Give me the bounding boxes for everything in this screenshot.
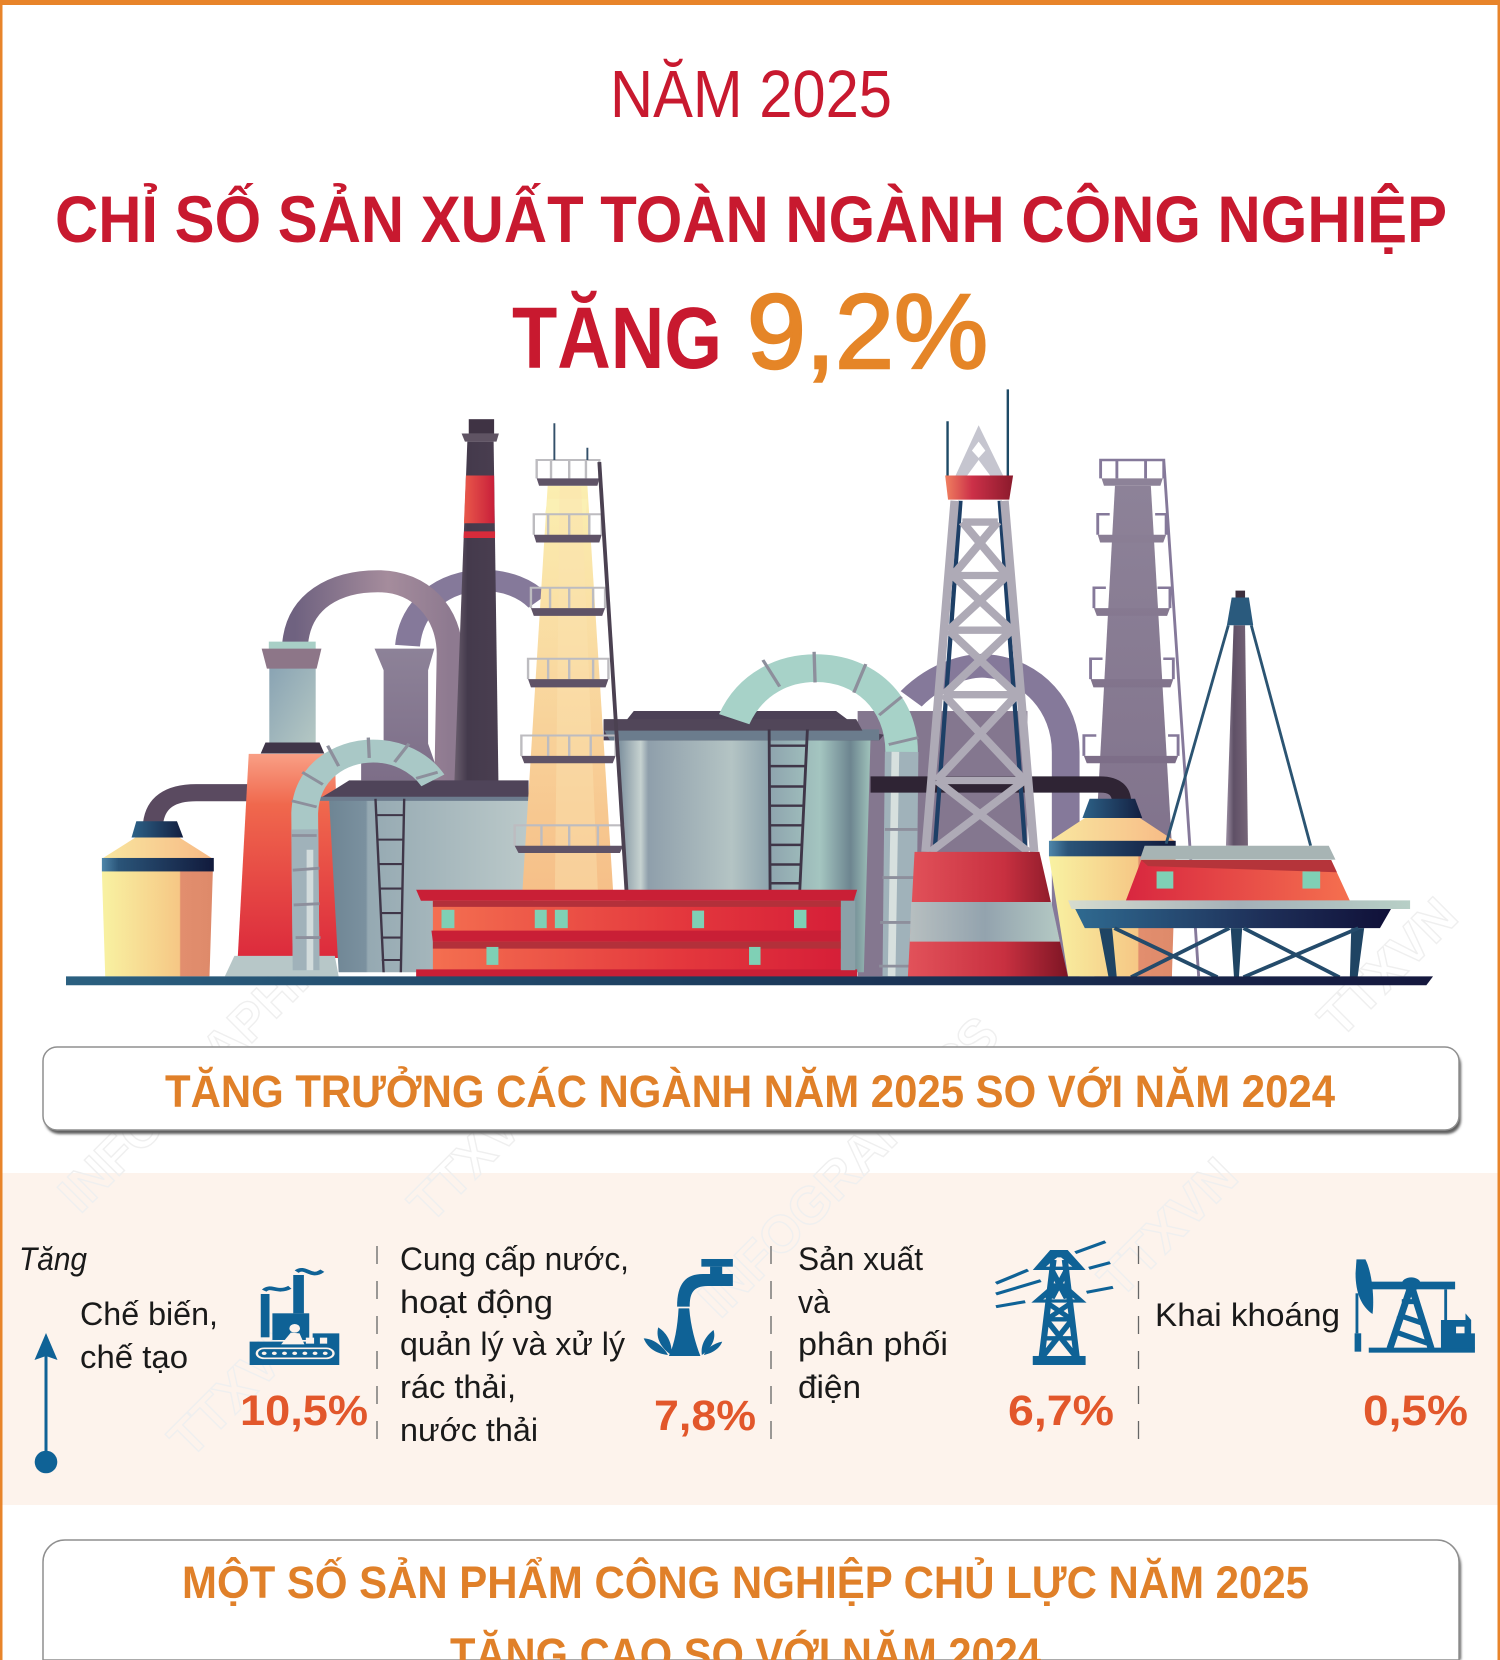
tower platforms <box>515 460 623 846</box>
ground line <box>66 976 1433 985</box>
title block <box>55 57 1447 391</box>
icon: water tap <box>644 1259 733 1356</box>
foreground purple arch pipe <box>295 581 450 784</box>
back silhouette: right tower <box>1084 460 1199 976</box>
tall dark chimney <box>454 419 499 781</box>
tower antennas <box>554 423 587 460</box>
axis label: increase: Tăng <box>19 1241 87 1277</box>
heading box: key industrial products <box>43 1540 1461 1660</box>
watermark: faint agency marks: TTXVN <box>397 1072 559 1233</box>
sector label: rác thải, <box>400 1369 516 1405</box>
sector: water supply <box>400 1241 756 1448</box>
sector label: phân phối <box>798 1326 948 1362</box>
rig windows <box>1157 871 1173 889</box>
building windows <box>441 910 806 965</box>
watermark: faint agency marks: TTXVN <box>157 1307 319 1468</box>
heading box: sector growth: TĂNG TRƯỞNG CÁC NGÀNH NĂM 2025 SO VỚI NĂM 2024 <box>165 1066 1335 1117</box>
value: 10,5% <box>240 1387 368 1435</box>
grey stack with flange <box>261 642 324 753</box>
derrick inner dark lines <box>935 501 1026 852</box>
sector label <box>80 1296 218 1375</box>
oil rig <box>1068 591 1410 978</box>
red building <box>416 890 857 977</box>
rig guy lines <box>1166 625 1311 846</box>
watermark: faint agency marks: INFOGRAPHICS <box>47 901 370 1223</box>
sector label: Sản xuất <box>798 1241 923 1277</box>
heading box: sector growth <box>43 1047 1461 1134</box>
illustration: industrial plant <box>66 389 1433 985</box>
sector label: nước thải <box>400 1412 538 1448</box>
derrick spire <box>955 425 1004 476</box>
sector label: Khai khoáng <box>1155 1297 1340 1333</box>
sector: electricity <box>798 1241 1114 1435</box>
sector label: hoạt động <box>400 1284 553 1320</box>
title: increase value: 9,2% <box>747 273 988 391</box>
teal pipe right <box>734 652 918 976</box>
yellow tower <box>515 423 627 893</box>
value: 6,7% <box>1008 1387 1114 1435</box>
left grey tank <box>317 780 533 972</box>
sector label <box>798 1241 948 1405</box>
watermark: faint agency marks: TTXVN <box>1307 887 1469 1048</box>
derrick tower <box>908 389 1068 977</box>
sector: mining <box>1155 1259 1475 1435</box>
arrow: upward trend <box>34 1333 58 1473</box>
sector label: chế tạo <box>80 1339 188 1375</box>
title: year: NĂM 2025 <box>610 57 892 132</box>
right pipe <box>871 784 1122 803</box>
icon: factory <box>250 1270 339 1365</box>
tower side ladder <box>599 462 627 893</box>
back silhouette: left chimney and arch <box>361 580 538 780</box>
watermark: faint agency marks: INFOGRAPHICS <box>687 1006 1010 1328</box>
teal pipe left <box>292 738 438 970</box>
sector label: và <box>798 1284 830 1320</box>
rig deck <box>1068 900 1410 909</box>
dashed separators <box>377 1246 1138 1445</box>
panel: sector growth band <box>0 1173 1500 1505</box>
sector: manufacturing <box>80 1270 368 1435</box>
sector label: quản lý và xử lý <box>400 1326 625 1362</box>
watermark: faint agency marks <box>47 887 1469 1468</box>
right yellow tank <box>1049 799 1176 976</box>
back silhouette: tank and arch behind derrick <box>858 666 1066 976</box>
left yellow tank <box>102 793 251 976</box>
sector label <box>400 1241 629 1448</box>
derrick base <box>908 852 1068 977</box>
icon: oil pump <box>1355 1259 1475 1353</box>
value: 0,5% <box>1363 1387 1468 1435</box>
rig mast <box>1226 625 1248 846</box>
heading box: key industrial products: MỘT SỐ SẢN PHẨM CÔNG NGHIỆP CHỦ LỰC NĂM 2025 <box>182 1557 1309 1608</box>
sector label: Cung cấp nước, <box>400 1241 629 1277</box>
derrick red box <box>945 476 1013 500</box>
orange block <box>225 754 341 976</box>
watermark: faint agency marks: TTXVN <box>1087 1147 1249 1308</box>
derrick antennas <box>948 389 1008 476</box>
rig cabin <box>1125 860 1350 902</box>
central tank ladder <box>769 729 807 891</box>
sector label: điện <box>798 1369 861 1405</box>
title: increase label: TĂNG <box>512 290 722 387</box>
sector label: Chế biến, <box>80 1296 218 1332</box>
central grey tank <box>604 711 884 972</box>
left tank ladder <box>375 799 404 972</box>
value: 7,8% <box>654 1392 756 1440</box>
icon: power pylon <box>996 1242 1113 1365</box>
rig legs <box>1099 928 1364 978</box>
